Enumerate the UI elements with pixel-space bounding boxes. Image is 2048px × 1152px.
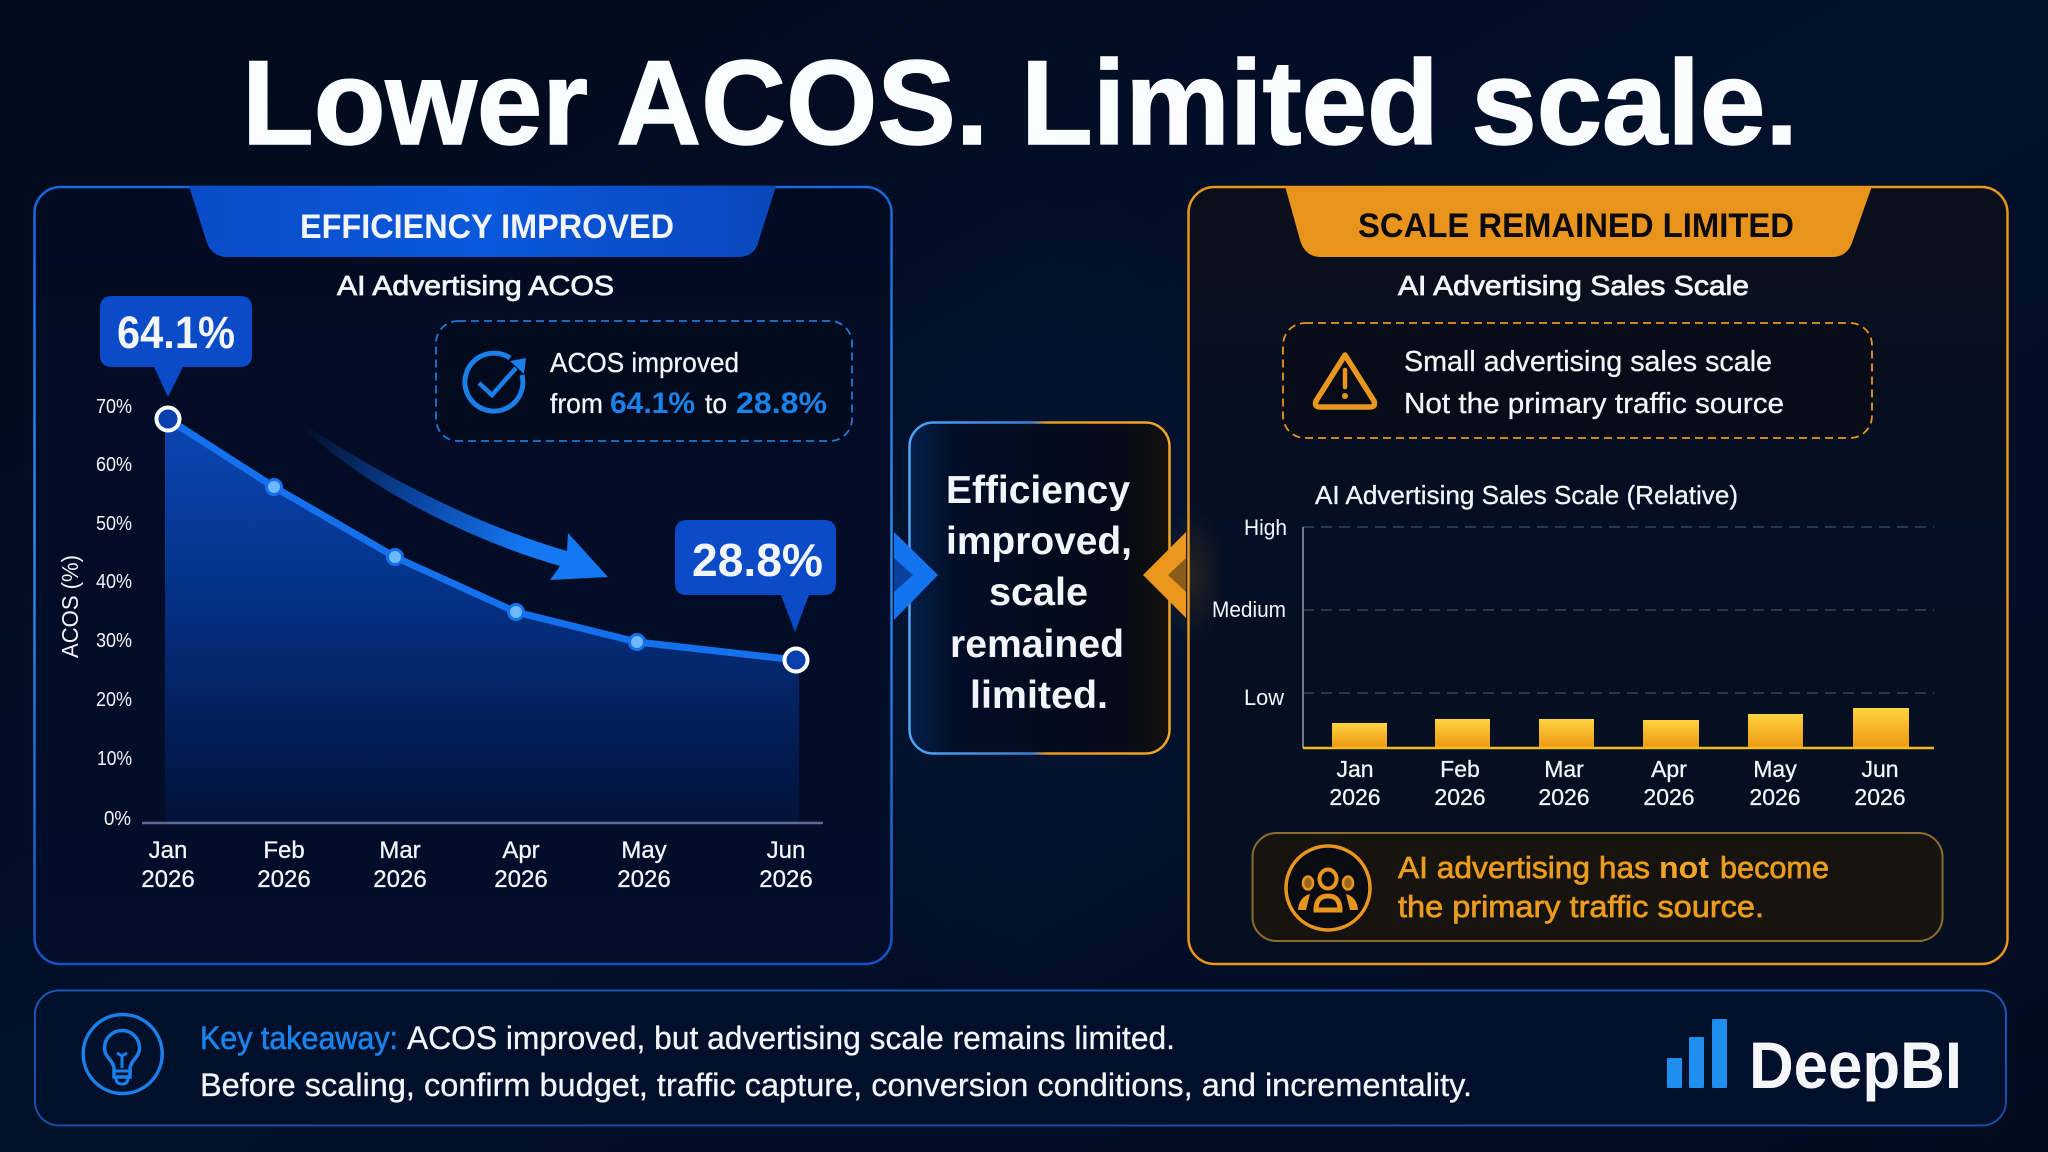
text: traffic source statement	[1398, 850, 1829, 924]
logo: DeepBI	[1667, 1019, 1962, 1102]
text: traffic source statement: become	[1720, 850, 1829, 885]
x axis month labels: May	[621, 837, 667, 864]
title: Lower ACOS. Limited scale.	[242, 36, 1798, 170]
x axis month labels: Jan	[149, 837, 187, 864]
x axis month labels: 2026	[141, 866, 195, 893]
bar chart: relative sales scale: 2026	[1434, 784, 1486, 810]
bar chart: relative sales scale: 2026	[1749, 784, 1801, 810]
panel: center summary: scale	[989, 571, 1088, 614]
text: key takeaway: Key takeaway:	[200, 1020, 398, 1056]
callout: small sales scale: Not the primary traffic source	[1404, 388, 1784, 420]
callout: 28.8%	[675, 520, 836, 632]
x axis month labels: 2026	[257, 866, 311, 893]
y axis labels: 30%	[96, 630, 132, 652]
callout: small sales scale	[1283, 323, 1872, 438]
x axis month labels	[141, 837, 813, 893]
callout: not the primary traffic source	[1252, 833, 1942, 941]
panel: key takeaway	[35, 990, 2006, 1126]
bar chart: relative sales scale: Jan	[1336, 756, 1374, 782]
panel: center summary	[910, 422, 1170, 754]
y axis labels: 10%	[97, 748, 132, 770]
y axis labels: 70%	[96, 396, 132, 418]
y axis labels	[96, 396, 132, 830]
bar chart: relative sales scale: 2026	[1329, 784, 1381, 810]
x axis month labels: Apr	[502, 837, 540, 864]
panel: center summary: improved,	[946, 520, 1132, 563]
text: traffic source statement: not	[1659, 850, 1709, 885]
bar chart: relative sales scale: May	[1753, 756, 1797, 782]
bar chart: relative sales scale: Mar	[1544, 756, 1584, 782]
text: traffic source statement: AI advertising has	[1398, 850, 1650, 885]
panel: center summary: Efficiency	[946, 469, 1130, 512]
icon: check with upward arrow	[465, 353, 526, 411]
heading tab: scale remained limited: SCALE REMAINED LIMITED	[1358, 207, 1794, 245]
panel: efficiency improved	[34, 186, 892, 964]
bar chart: relative sales scale: Feb	[1440, 756, 1480, 782]
y axis labels: 0%	[104, 808, 131, 830]
x axis month labels: 2026	[759, 866, 813, 893]
chart subtitle: AI Advertising Sales Scale	[1398, 270, 1749, 301]
arrow: orange chevron	[1143, 532, 1186, 618]
callout: 64.1%: 64.1%	[117, 307, 235, 358]
y axis labels: 40%	[96, 571, 132, 593]
y axis labels: 60%	[96, 454, 132, 476]
x axis month labels: Jun	[767, 837, 805, 864]
heading tab: efficiency improved: EFFICIENCY IMPROVED	[300, 208, 674, 246]
heading tab: scale remained limited	[1285, 186, 1872, 257]
text: traffic source statement: the primary traffic source.	[1398, 889, 1764, 924]
text: key takeaway	[200, 1020, 1472, 1103]
arrow: blue chevron	[894, 532, 938, 620]
callout: ACOS improved: ACOS improved	[550, 347, 739, 378]
icon: light bulb	[83, 1014, 162, 1094]
y axis labels: 20%	[96, 689, 132, 711]
bar chart: relative sales scale	[1212, 515, 1934, 810]
callout: 64.1%	[100, 296, 252, 397]
callout: small sales scale: Small advertising sales scale	[1404, 346, 1772, 378]
callout: ACOS improved	[436, 321, 852, 441]
bar chart: relative sales scale: High	[1244, 515, 1287, 540]
bar chart: relative sales scale: 2026	[1538, 784, 1590, 810]
bar chart: relative sales scale: Medium	[1212, 597, 1286, 622]
icon: people in circle	[1286, 846, 1370, 930]
text: key takeaway: Before scaling, confirm budget, traffic capture, conversion conditions, and incrementality.	[200, 1067, 1472, 1103]
bar chart: relative sales scale: Low	[1244, 685, 1284, 710]
callout: ACOS improved: to	[705, 388, 727, 419]
bar chart: relative sales scale: Jun	[1861, 756, 1899, 782]
arrow: downward trend	[303, 423, 608, 580]
bar chart title: AI Advertising Sales Scale (Relative)	[1315, 480, 1738, 510]
panel: center summary: remained	[950, 623, 1124, 666]
panel: center summary: limited.	[970, 674, 1108, 717]
logo: DeepBI: DeepBI	[1749, 1028, 1962, 1102]
x axis month labels: Feb	[263, 837, 305, 864]
heading tab: efficiency improved	[189, 186, 776, 257]
callout: 28.8%: 28.8%	[692, 534, 823, 586]
chart subtitle: AI Advertising ACOS	[337, 270, 614, 301]
y axis title: ACOS (%)	[57, 555, 83, 658]
bar chart: relative sales scale: 2026	[1643, 784, 1695, 810]
x axis month labels: 2026	[494, 866, 548, 893]
x axis month labels: 2026	[617, 866, 671, 893]
x axis month labels: Mar	[379, 837, 421, 864]
callout: ACOS improved: 28.8%	[736, 387, 827, 420]
panel: scale remained limited	[1158, 186, 2008, 964]
x axis month labels: 2026	[373, 866, 427, 893]
text: key takeaway: ACOS improved, but advertising scale remains limited.	[407, 1020, 1175, 1056]
bar chart: relative sales scale: 2026	[1854, 784, 1906, 810]
callout: ACOS improved: from	[550, 388, 603, 419]
line chart: ACOS by month	[142, 408, 823, 823]
callout: ACOS improved: 64.1%	[610, 387, 695, 420]
y axis labels: 50%	[96, 513, 132, 535]
bar chart: relative sales scale: Apr	[1651, 756, 1687, 782]
icon: warning triangle	[1316, 355, 1374, 407]
